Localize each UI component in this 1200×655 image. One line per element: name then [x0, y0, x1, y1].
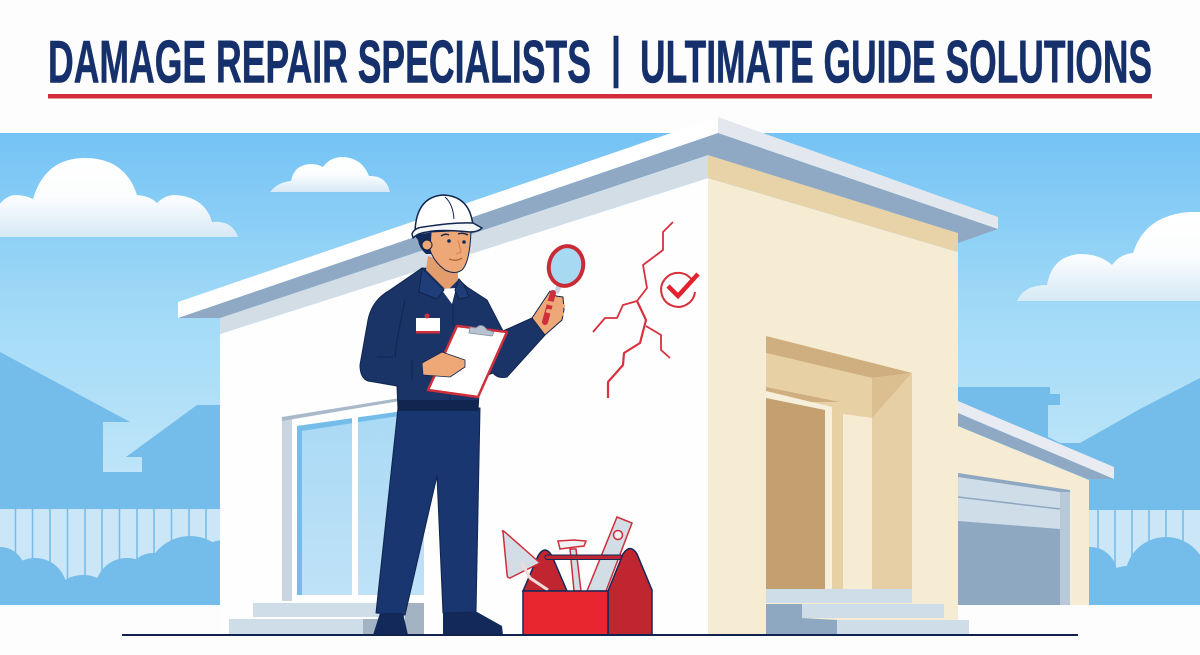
toolbox right gable and side	[608, 548, 652, 635]
worker	[360, 195, 588, 635]
crack in wall	[593, 222, 673, 398]
worker face	[414, 230, 471, 272]
title: DAMAGE REPAIR SPECIALISTS	[48, 28, 591, 96]
house: cream side wall	[708, 178, 958, 635]
background fence left	[0, 509, 220, 590]
cloud: small centre	[270, 157, 390, 192]
worker right hand	[532, 291, 564, 335]
toolbox front	[523, 591, 608, 635]
sky	[0, 133, 1200, 605]
hammer	[558, 540, 586, 591]
entrance recess	[766, 336, 912, 590]
toolbox left gable	[523, 550, 567, 591]
clipboard	[428, 325, 507, 397]
title: |	[611, 26, 621, 88]
title underline	[48, 94, 1152, 98]
house: white front wall	[220, 178, 708, 635]
worker badge	[416, 314, 440, 334]
entrance steps	[766, 589, 969, 634]
window steps	[229, 603, 424, 634]
worker belt	[398, 400, 478, 411]
ground	[0, 605, 1200, 655]
background bushes right	[1063, 537, 1200, 638]
toolbox	[502, 517, 652, 635]
background houses left	[0, 352, 221, 509]
background bushes left	[0, 536, 254, 645]
magnifier grip	[545, 293, 553, 322]
roof	[178, 117, 998, 334]
worker left hand	[422, 352, 465, 377]
worker legs	[376, 408, 480, 615]
worker neck	[426, 256, 458, 291]
magnifier fingers	[548, 303, 563, 314]
cloud: right	[1017, 212, 1200, 301]
magnifying glass	[544, 242, 588, 293]
background houses right	[958, 378, 1200, 510]
icon: check mark	[661, 273, 698, 307]
worker shirt	[441, 288, 456, 304]
ground line	[122, 634, 1078, 636]
worker hard hat	[412, 195, 482, 238]
sleeve seams	[377, 300, 453, 410]
worker coverall torso and arms	[360, 268, 545, 410]
window	[282, 398, 424, 601]
cloud: large left	[0, 158, 238, 237]
garage wing	[958, 401, 1114, 605]
background fence right	[1085, 510, 1200, 590]
spirit level	[587, 517, 632, 591]
worker collar	[419, 268, 469, 299]
trowel	[502, 531, 548, 590]
toolbox handle	[545, 555, 623, 560]
worker boots	[373, 612, 503, 635]
